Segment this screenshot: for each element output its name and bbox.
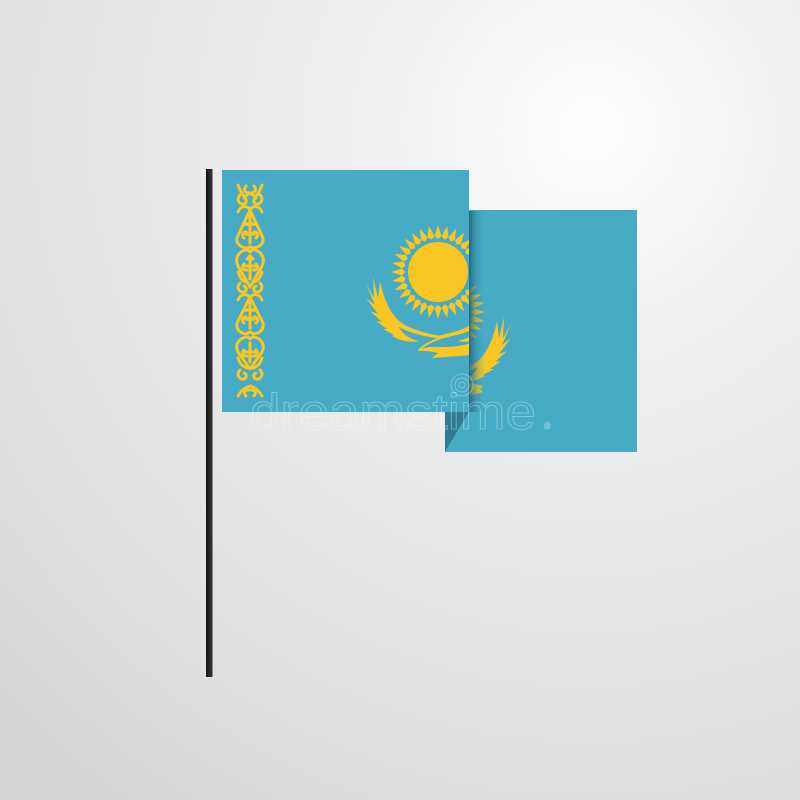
watermark word: dreamstime xyxy=(250,384,536,440)
fold shadow xyxy=(469,211,486,412)
national ornament xyxy=(237,185,263,396)
flag xyxy=(222,170,637,452)
sun and eagle emblem xyxy=(366,225,469,358)
left flag panel xyxy=(222,170,469,412)
watermark spiral xyxy=(451,374,473,396)
flag pole xyxy=(206,169,212,677)
watermark xyxy=(250,374,551,440)
fold underside xyxy=(445,412,469,452)
right flag panel xyxy=(445,210,637,452)
watermark registered mark: ® xyxy=(544,421,551,431)
